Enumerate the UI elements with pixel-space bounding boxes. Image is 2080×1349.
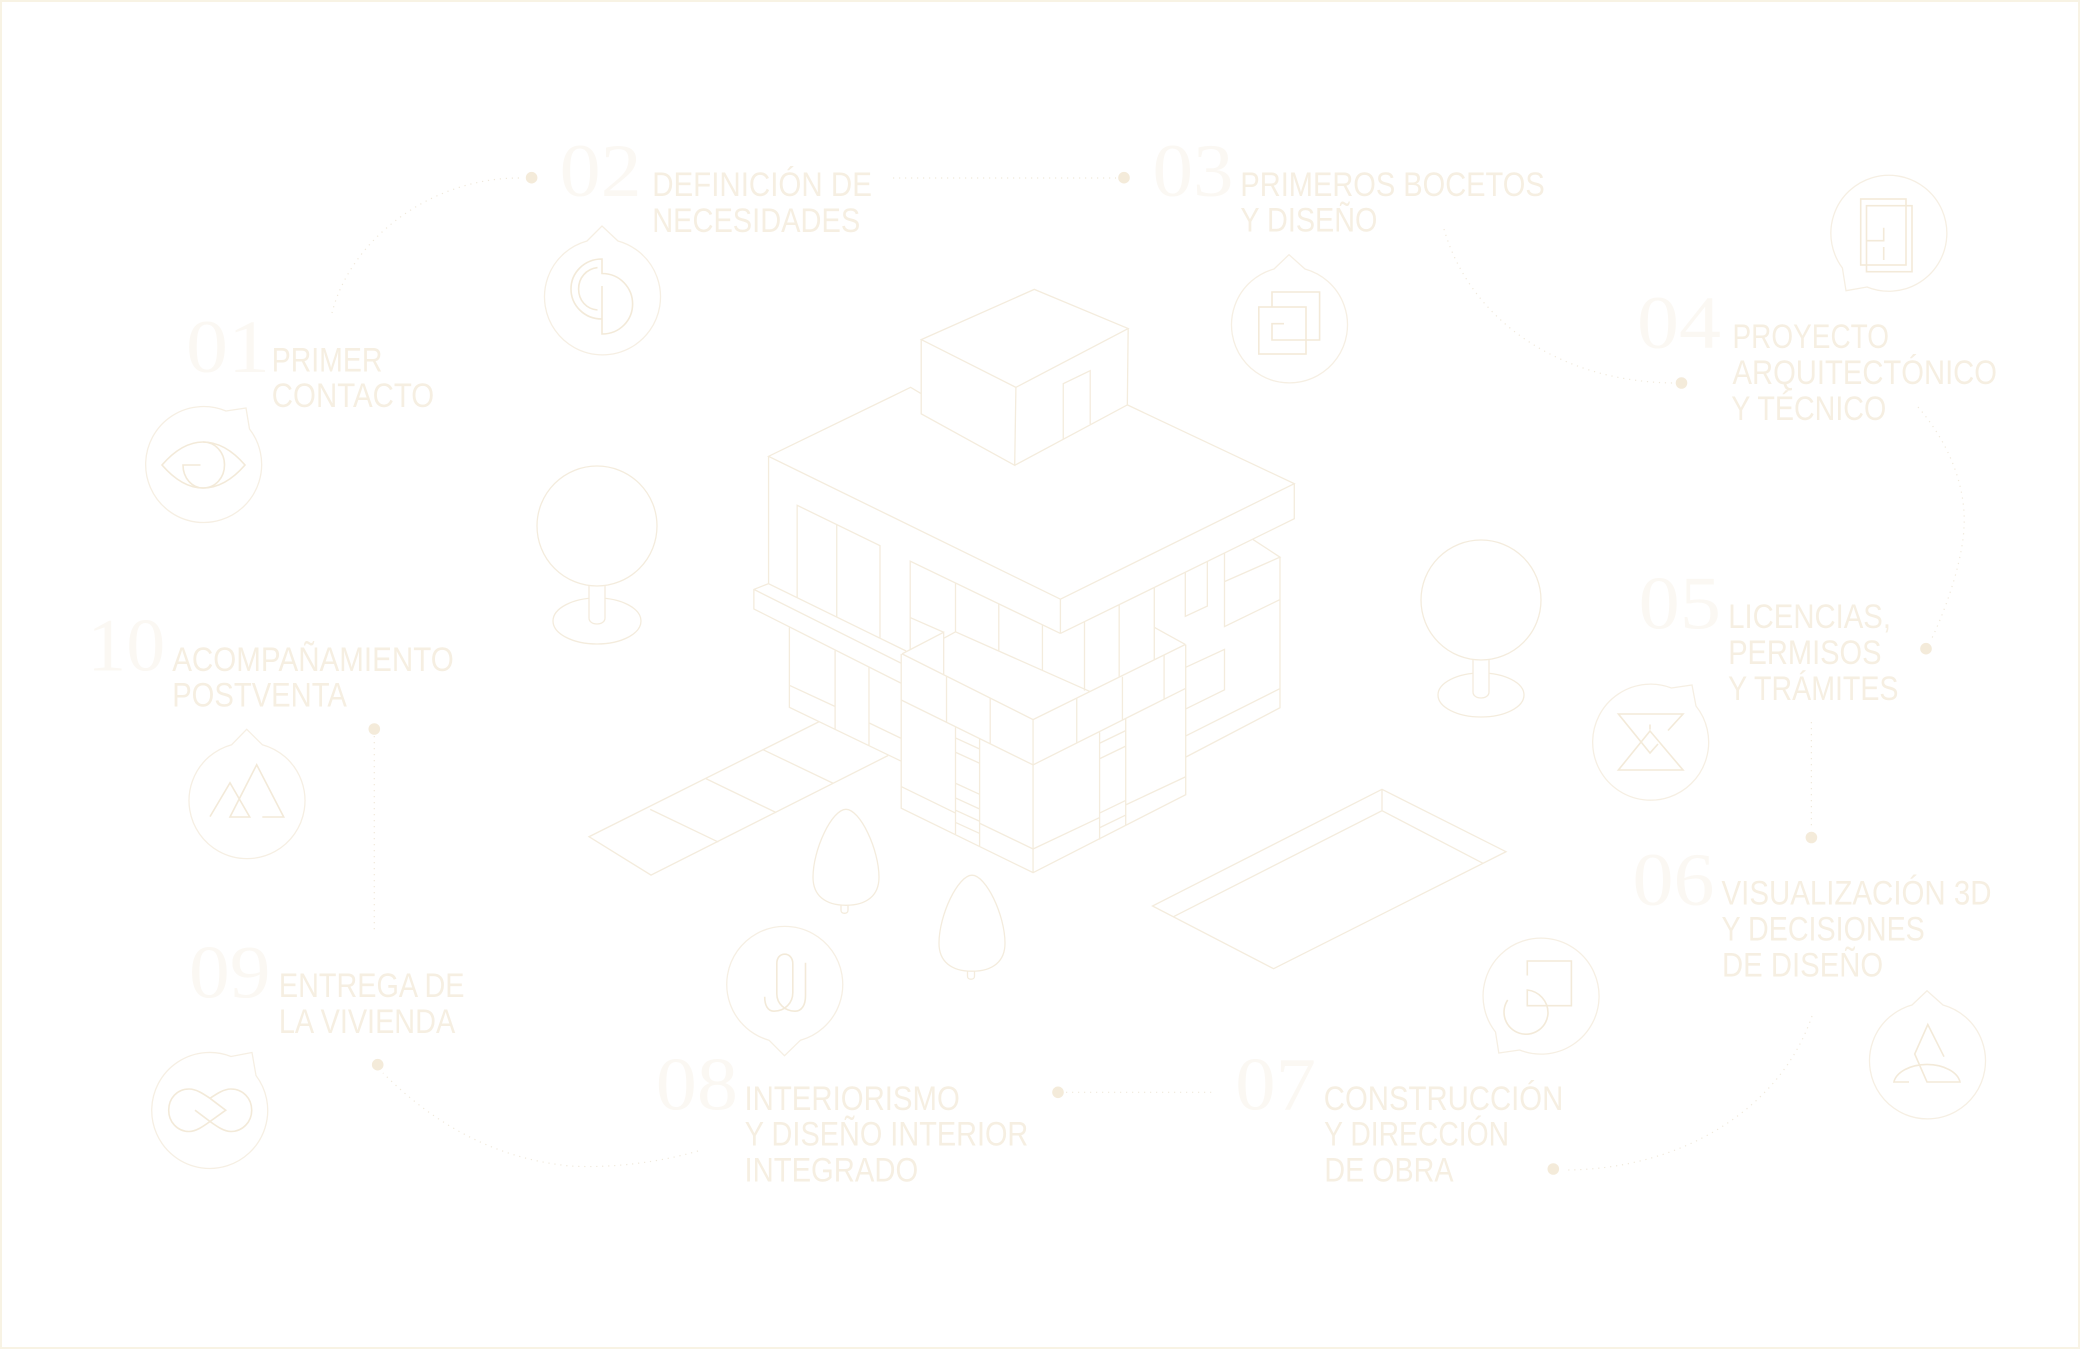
step 08: INTERIORISMO: [744, 1080, 960, 1118]
step 08: 08: [656, 1044, 738, 1126]
step 07: DE OBRA: [1324, 1152, 1454, 1190]
step 07: Y DIRECCIÓN: [1324, 1114, 1509, 1154]
step 07: 07: [1235, 1044, 1316, 1126]
step 09: [189, 932, 464, 1041]
step 07: CONSTRUCCIÓN: [1324, 1079, 1563, 1118]
icon: hourglass: [1593, 684, 1709, 800]
step 03: [1152, 130, 1545, 240]
step 04: 04: [1637, 282, 1721, 365]
tree: small right: [939, 875, 1005, 979]
icon: square and circle: [1483, 938, 1599, 1054]
step 04: ARQUITECTÓNICO: [1732, 353, 1997, 392]
step 06: 06: [1632, 839, 1714, 922]
step 01: [186, 306, 434, 415]
step 05: PERMISOS: [1728, 634, 1882, 672]
step 01: 01: [186, 306, 270, 389]
step 06: [1632, 839, 1992, 985]
icon: overlapping squares: [1231, 255, 1348, 383]
step 02: [560, 130, 872, 240]
step 04: Y TÉCNICO: [1731, 389, 1886, 428]
garden path: [589, 722, 888, 875]
icon: floor plan: [1831, 175, 1947, 291]
step 05: Y TRÁMITES: [1728, 669, 1898, 708]
step 10: ACOMPAÑAMIENTO: [172, 640, 454, 679]
step 09: LA VIVIENDA: [279, 1003, 455, 1041]
step 10: POSTVENTA: [172, 677, 347, 715]
step 06: VISUALIZACIÓN 3D: [1722, 874, 1992, 912]
swimming pool: [1152, 789, 1506, 969]
step 06: DE DISEÑO: [1722, 946, 1883, 985]
step 10: 10: [87, 604, 165, 688]
step 09: 09: [189, 932, 270, 1014]
step 01: CONTACTO: [272, 377, 434, 415]
step 05: 05: [1639, 562, 1721, 646]
icon: split circle: [544, 226, 660, 355]
step 04: PROYECTO: [1732, 318, 1889, 356]
step 01: PRIMER: [272, 342, 382, 380]
step markers: [368, 172, 1932, 1175]
step 04: [1637, 282, 1997, 428]
icon: mountains: [189, 729, 305, 859]
step 05: LICENCIAS,: [1728, 598, 1891, 636]
step 09: ENTREGA DE: [279, 967, 464, 1005]
step 02: NECESIDADES: [652, 202, 860, 240]
step 03: Y DISEÑO: [1240, 200, 1377, 240]
tree: left round: [537, 466, 657, 644]
icon: triangle and arc: [1870, 991, 1985, 1119]
dotted connectors between steps: [332, 178, 1964, 1170]
step 06: Y DECISIONES: [1722, 911, 1925, 949]
tree: small left: [813, 809, 879, 913]
step 03: PRIMEROS BOCETOS: [1240, 166, 1545, 204]
icon: paperclip: [727, 926, 843, 1056]
step 02: DEFINICIÓN DE: [652, 165, 872, 204]
step 08: INTEGRADO: [744, 1152, 918, 1190]
step 05: [1639, 562, 1898, 708]
step 03: 03: [1152, 130, 1234, 213]
tree: right round: [1421, 540, 1541, 717]
house illustration: [754, 289, 1294, 873]
icon: infinity: [152, 1052, 268, 1168]
icon: eye: [146, 407, 262, 523]
step 02: 02: [560, 130, 642, 213]
step 08: [656, 1044, 1028, 1190]
step 08: Y DISEÑO INTERIOR: [745, 1114, 1028, 1154]
step 10: [87, 604, 454, 715]
step 07: [1235, 1044, 1563, 1190]
